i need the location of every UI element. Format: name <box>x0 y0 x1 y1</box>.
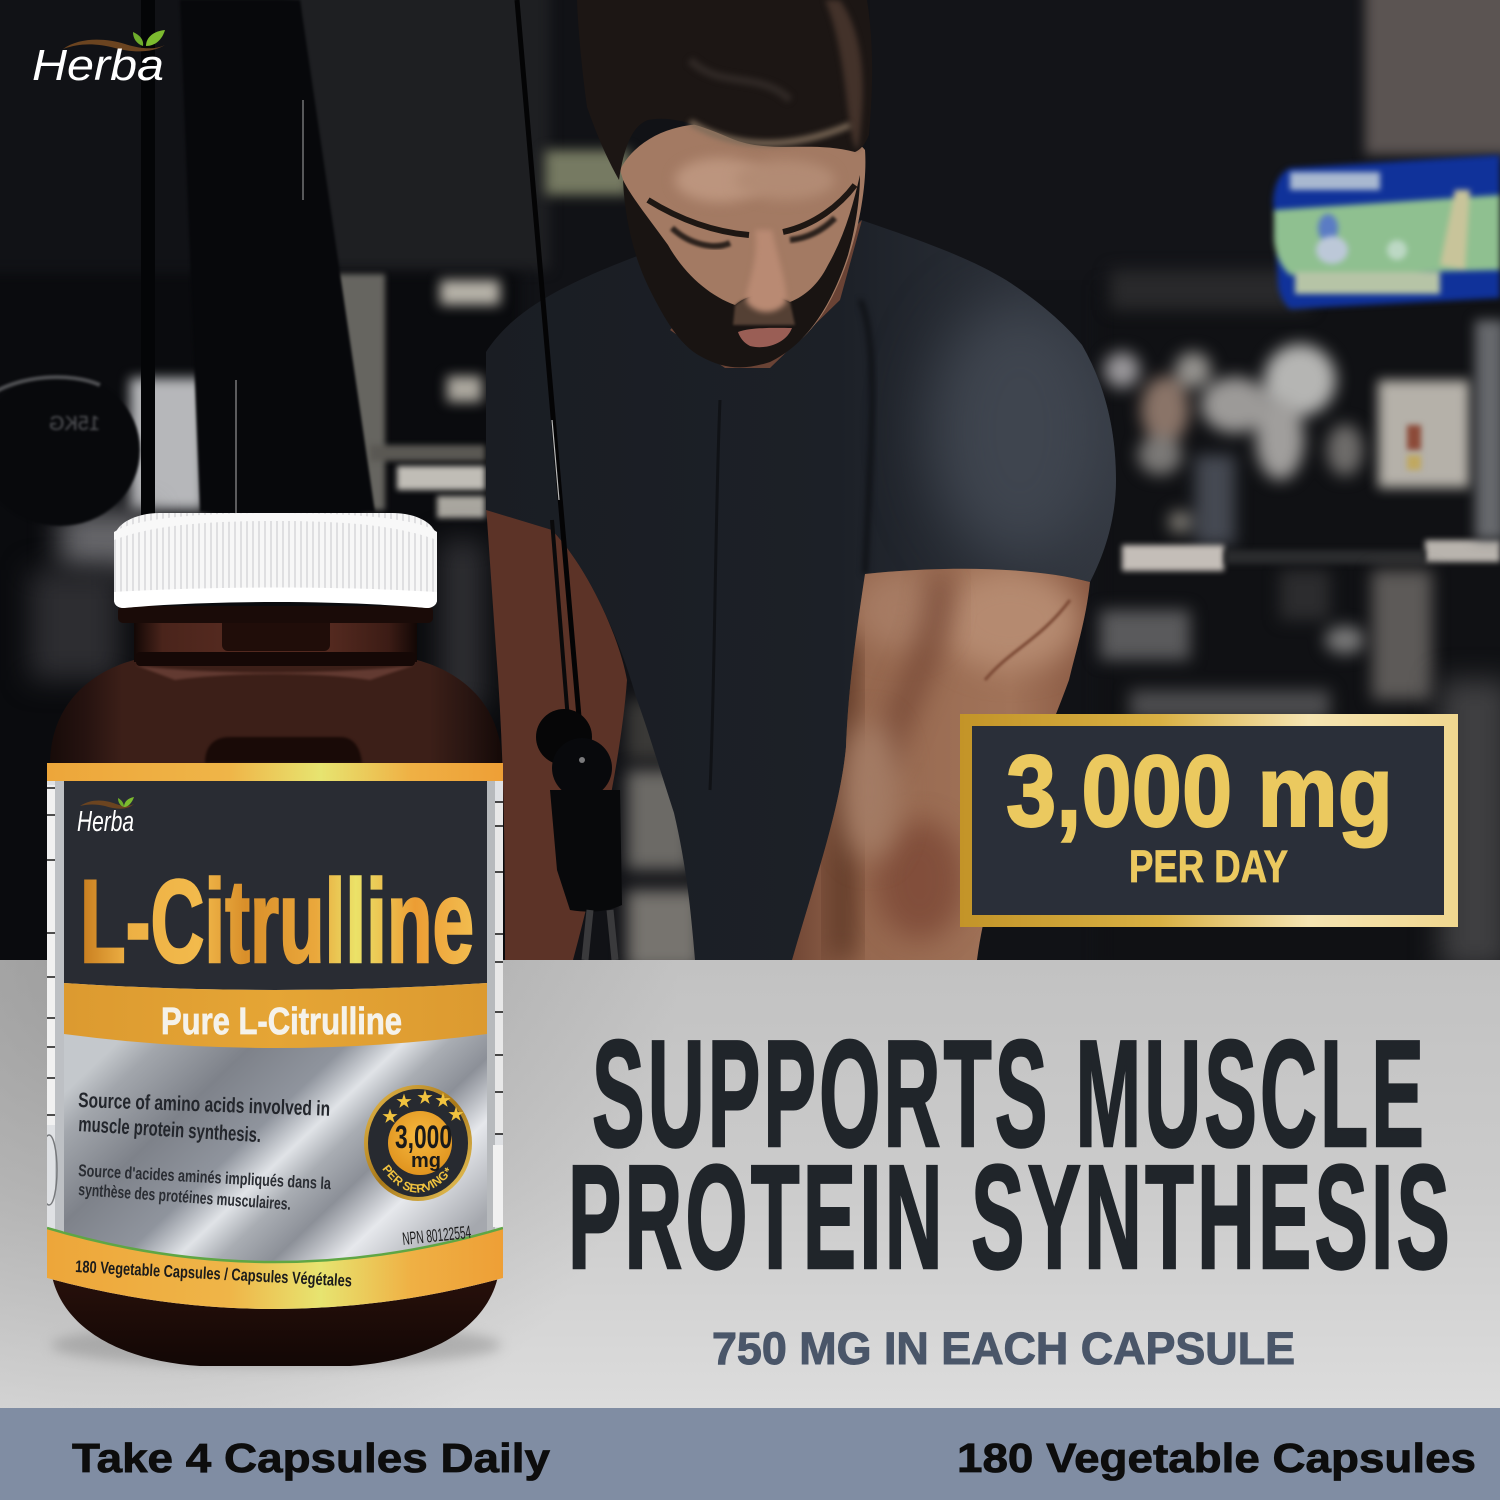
silver panel <box>64 1034 487 1290</box>
bottom gold band <box>47 1229 503 1309</box>
brows and eyes <box>648 200 749 235</box>
TV screen <box>1273 155 1500 309</box>
glass shoulder <box>50 660 502 800</box>
callout: 3,000 mg per day: 3,000 mg <box>1006 736 1393 848</box>
badge 3,000 mg per serving: ★ <box>435 1091 451 1110</box>
label <box>41 763 503 1345</box>
badge 3,000 mg per serving: ★ <box>382 1107 398 1126</box>
weight plate <box>0 374 140 526</box>
neck <box>670 220 862 368</box>
footer bar <box>0 1408 1500 1500</box>
label logo <box>77 797 134 838</box>
nose <box>746 230 786 312</box>
badge 3,000 mg per serving: ★ <box>448 1105 464 1124</box>
face <box>620 124 865 361</box>
cable and handle <box>517 0 622 960</box>
npn number: NPN 80122554 <box>401 1222 472 1249</box>
badge 3,000 mg per serving: PER SERVING* <box>382 1164 450 1193</box>
beard <box>623 175 860 367</box>
logo: Herba: Herba <box>32 41 164 90</box>
subheadline: 750 MG IN EACH CAPSULE <box>712 1323 1295 1374</box>
label description french: Source d'acides aminés impliqués dans la <box>78 1161 332 1193</box>
weight plate: 15KG <box>49 413 100 435</box>
dark panel <box>64 775 487 990</box>
background photo: gym scene <box>0 0 1500 975</box>
footer text right: 180 Vegetable Capsules <box>957 1435 1476 1481</box>
callout: 3,000 mg per day: PER DAY <box>1129 841 1288 892</box>
neck ring <box>118 606 433 623</box>
hair <box>577 0 872 180</box>
label description french <box>78 1161 332 1214</box>
neck <box>134 620 417 662</box>
label logo: Herba <box>77 806 134 838</box>
headline <box>568 1009 1453 1300</box>
cap <box>114 513 437 608</box>
badge 3,000 mg per serving: ★ <box>417 1088 433 1107</box>
upper gold band <box>47 763 503 781</box>
badge 3,000 mg per serving: ★ <box>396 1092 412 1111</box>
blurred blobs right side <box>1100 344 1365 720</box>
man: t-shirt <box>480 210 1130 970</box>
grey band <box>0 960 1500 1408</box>
product bottle <box>47 513 503 1371</box>
middle gold band <box>64 983 487 1048</box>
gym machine uprights <box>141 0 375 515</box>
label description english: muscle protein synthesis. <box>78 1113 262 1147</box>
man: forearm <box>792 568 1090 960</box>
label title: L-Citrulline <box>80 856 474 988</box>
badge 3,000 mg per serving: 3,000 <box>395 1119 452 1155</box>
label description french: synthèse des protéines musculaires. <box>78 1180 292 1214</box>
label description english: Source of amino acids involved in <box>78 1089 330 1121</box>
badge 3,000 mg per serving: mg <box>411 1150 441 1172</box>
footer text left: Take 4 Capsules Daily <box>72 1435 550 1481</box>
label subtitle: Pure L-Citrulline <box>161 1001 402 1043</box>
label side panels <box>41 781 503 1231</box>
lips <box>738 328 792 347</box>
gym background: walls and blurred equipment <box>0 0 1500 975</box>
man: head <box>577 0 872 368</box>
capsule count: 180 Vegetable Capsules / Capsules Végétales <box>75 1257 352 1290</box>
badge 3,000 mg per serving <box>364 1085 472 1201</box>
label description english <box>78 1089 330 1147</box>
bottle shadow <box>51 1323 501 1367</box>
man: far arm <box>486 505 627 960</box>
callout: 3,000 mg per day <box>960 714 1458 927</box>
glass base <box>50 1260 500 1366</box>
